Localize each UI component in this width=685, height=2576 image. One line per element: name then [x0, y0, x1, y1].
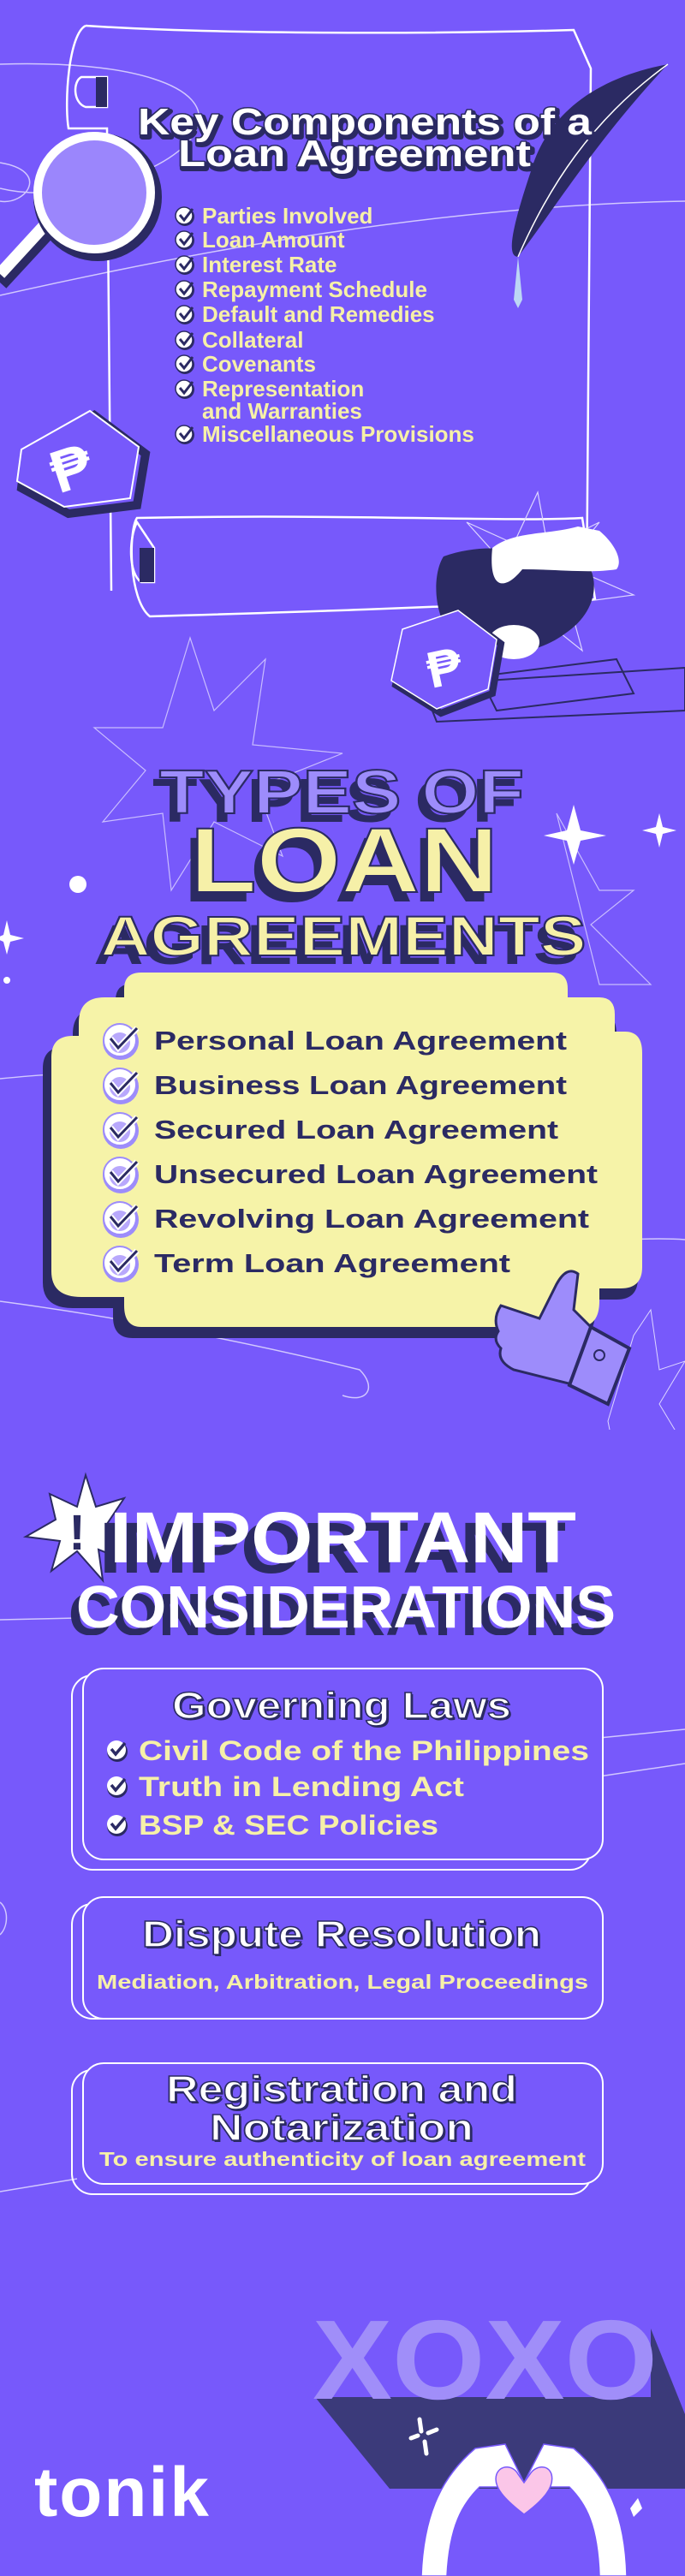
icon: quill: [512, 64, 668, 308]
footer: xoxo and hands: XOXO: [313, 2297, 658, 2423]
panel: dispute resolution: Dispute Resolution: [142, 1913, 541, 1955]
icon: exclamation starburst: !: [68, 1505, 86, 1561]
panel: types list: Personal Loan Agreement: [154, 1026, 567, 1056]
panel: registration: Notarization: [211, 2109, 475, 2151]
list: key components: Default and Remedies: [202, 301, 435, 327]
panel: governing laws: [107, 1685, 589, 1841]
icon: sparkle: [411, 2419, 437, 2454]
list: key components: Parties Involved: [202, 203, 372, 229]
icon: peso coin left: ₱: [42, 430, 101, 506]
title: types of loan agreements: AGREEMENTS: [94, 913, 579, 976]
panel: governing laws: Governing Laws: [172, 1685, 511, 1727]
panel: registration: To ensure authenticity of loan agreement: [99, 2148, 586, 2170]
list: key components: Collateral: [202, 327, 303, 353]
list: key components: [175, 203, 474, 447]
icon: handshake with coin and bills: ₱: [422, 636, 468, 699]
title: key components: [138, 101, 595, 179]
panel: types list: Secured Loan Agreement: [154, 1115, 558, 1145]
panel: types list: [43, 973, 642, 1338]
title: key components: Loan Agreement: [178, 133, 531, 175]
panel: governing laws: Governing Laws: [174, 1687, 513, 1728]
stars: [0, 805, 676, 984]
title: types of loan agreements: [94, 759, 586, 976]
panel: types list: Revolving Loan Agreement: [154, 1204, 589, 1234]
icon: exclamation starburst: [26, 1475, 124, 1580]
list: key components: Covenants: [202, 351, 316, 377]
list: key components: Miscellaneous Provisions: [202, 421, 474, 447]
title: types of loan agreements: TYPES OF: [152, 767, 517, 836]
panel: types list: Unsecured Loan Agreement: [154, 1159, 598, 1189]
title: key components: Loan Agreement: [180, 135, 533, 177]
title: important considerations: IMPORTANT: [110, 1497, 576, 1578]
panel: governing laws: Civil Code of the Philippines: [139, 1735, 589, 1766]
panels: considerations: [71, 1668, 604, 2195]
panel: dispute resolution: Dispute Resolution: [144, 1915, 543, 1957]
title: types of loan agreements: TYPES OF: [159, 759, 524, 827]
panel: registration: Registration and: [166, 2068, 517, 2110]
icon: thumbs up: [495, 1270, 685, 1430]
icon: magnifier: [0, 136, 156, 283]
title: important considerations: [23, 1472, 616, 1635]
title: types of loan agreements: AGREEMENTS: [101, 904, 586, 967]
title: types of loan agreements: LOAN: [190, 808, 498, 912]
icon: peso coin left: [17, 411, 146, 514]
icon: heart hands: [421, 2444, 627, 2576]
panel: registration: Registration and: [168, 2070, 519, 2112]
panel: types list: Term Loan Agreement: [154, 1248, 510, 1278]
title: key components: Key Components of a: [138, 101, 593, 143]
panel: governing laws: Truth in Lending Act: [139, 1771, 464, 1802]
list: key components: Repayment Schedule: [202, 277, 427, 302]
panel: dispute resolution: Mediation, Arbitration, Legal Proceedings: [97, 1971, 588, 1993]
list: key components: Interest Rate: [202, 252, 337, 277]
list: key components: and Warranties: [202, 398, 362, 424]
panel: registration: Notarization: [210, 2107, 474, 2149]
icon: handshake with coin and bills: [391, 492, 685, 722]
panel: dispute resolution: [97, 1913, 588, 1993]
panel: governing laws: BSP & SEC Policies: [139, 1810, 438, 1841]
panel: types list: Business Loan Agreement: [154, 1070, 567, 1100]
scroll illustration: [0, 24, 685, 723]
list: key components: Loan Amount: [202, 227, 345, 253]
title: important considerations: IMPORTANT: [99, 1508, 566, 1588]
title: types of loan agreements: LOAN: [183, 818, 491, 921]
panel: registration: [99, 2068, 586, 2170]
list: key components: Representation: [202, 376, 364, 402]
title: key components: Key Components of a: [140, 104, 594, 146]
logo: tonik: tonik: [34, 2454, 211, 2531]
footer: xoxo and hands: [313, 2297, 685, 2575]
